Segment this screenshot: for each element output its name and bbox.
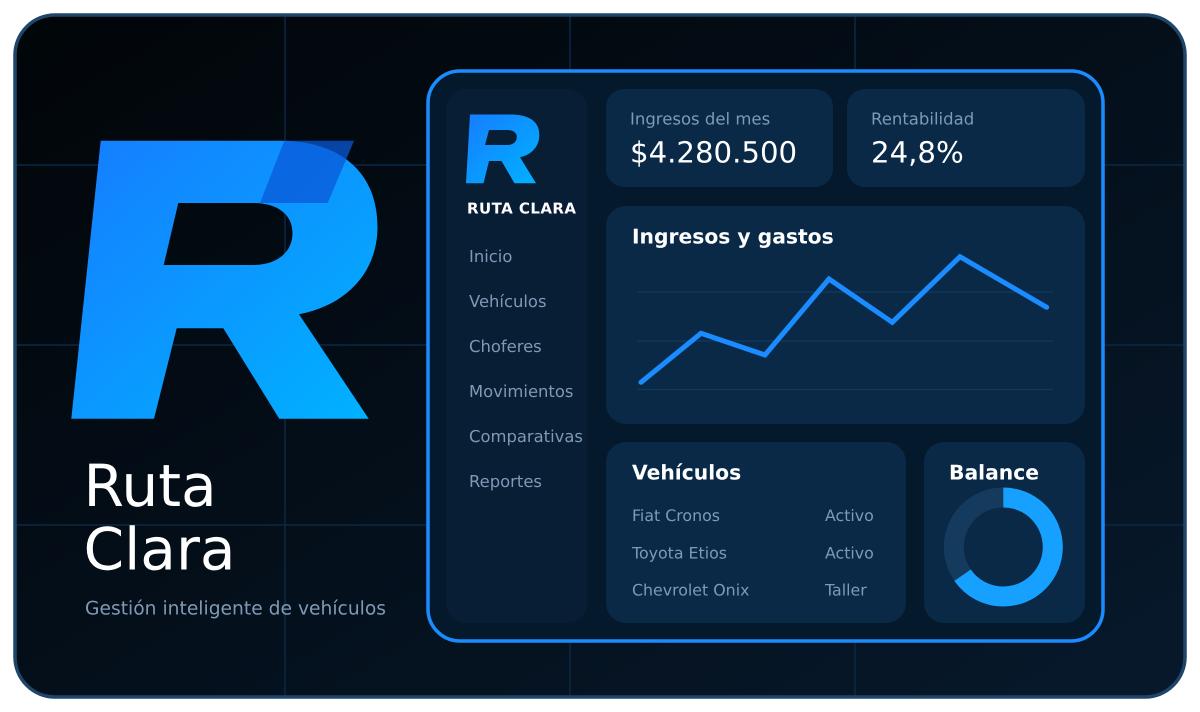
panel: balance — [924, 442, 1085, 623]
subtitle: Gestión inteligente de vehículos — [85, 598, 386, 620]
panel: vehiculos: Activo — [825, 506, 874, 525]
panel: ingresos y gastos — [606, 206, 1085, 424]
icon: small R logo — [466, 114, 539, 183]
title: Ruta — [84, 452, 217, 520]
panel: vehiculos: Chevrolet Onix — [632, 581, 749, 600]
panel: balance: Balance — [949, 460, 1039, 484]
panel: vehiculos — [606, 442, 906, 623]
panel: ingresos del mes — [606, 89, 833, 187]
donut chart — [954, 497, 1053, 596]
icon: large R logo — [71, 141, 378, 419]
panel: vehiculos: Vehículos — [632, 460, 741, 484]
sidebar navigation: Inicio — [469, 247, 512, 266]
title: Clara — [84, 516, 236, 584]
panel: vehiculos: Activo — [825, 543, 874, 562]
panel: sidebar — [446, 89, 587, 623]
sidebar navigation: Movimientos — [469, 382, 573, 401]
panel: ingresos del mes: $4.280.500 — [630, 135, 797, 169]
sidebar brand name: RUTA CLARA — [467, 200, 576, 218]
heading: ingresos y gastos: Ingresos y gastos — [632, 224, 834, 248]
panel: rentabilidad — [847, 89, 1085, 187]
line chart — [641, 257, 1047, 382]
panel: dashboard — [428, 71, 1103, 641]
title — [84, 452, 236, 584]
panel: ingresos del mes: Ingresos del mes — [630, 109, 770, 128]
sidebar navigation: Comparativas — [469, 427, 583, 446]
panel: vehiculos: Fiat Cronos — [632, 506, 720, 525]
panel: vehiculos: Toyota Etios — [631, 543, 727, 562]
panel: rentabilidad: 24,8% — [871, 135, 964, 169]
sidebar navigation: Vehículos — [469, 292, 546, 311]
panel: vehiculos: Taller — [824, 581, 867, 600]
sidebar navigation: Choferes — [469, 337, 542, 356]
sidebar navigation: Reportes — [469, 472, 542, 491]
sidebar navigation — [469, 247, 583, 491]
panel: rentabilidad: Rentabilidad — [871, 109, 974, 128]
